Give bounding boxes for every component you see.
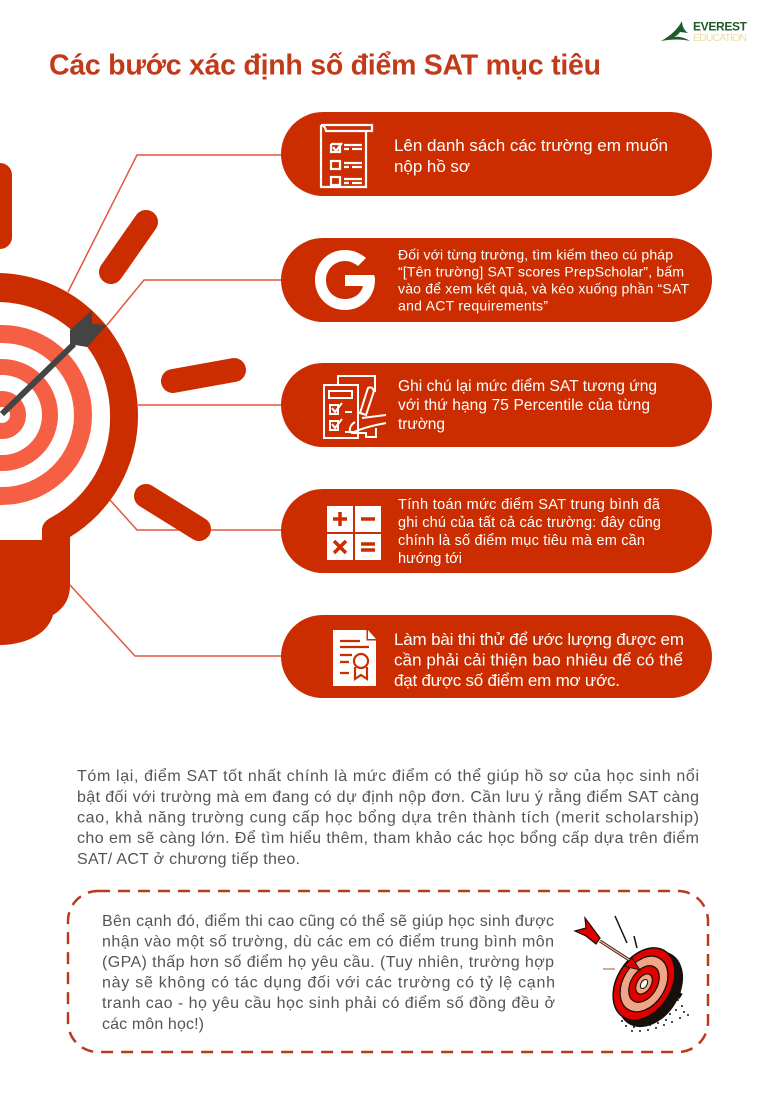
callout text: này sẽ không có tác dụng đối với các trường có tỷ lệ cạnh (102, 974, 555, 992)
connector lines (68, 155, 290, 656)
step 2 text (398, 246, 689, 314)
step 4 pill (281, 489, 712, 573)
step 3 pill (281, 363, 712, 447)
summary paragraph: cao, khả năng trường cung cấp học bổng dựa trên thành tích (merit scholarship) (77, 808, 699, 826)
icon: checklist (321, 125, 372, 187)
title: Các bước xác định số điểm SAT mục tiêu (49, 50, 601, 82)
callout text: tranh cao - họ yêu cầu học sinh phải có điểm số đồng đều ở (102, 994, 556, 1012)
callout box (68, 891, 708, 1052)
callout text: nhận vào một số trường, dù các em có điểm trung bình môn (102, 932, 554, 950)
step 5 text (394, 630, 684, 690)
step 4 text: ghi chú của tất cả các trường: đây cũng (398, 515, 661, 531)
step 5 pill (281, 615, 712, 698)
summary paragraph: Tóm lại, điểm SAT tốt nhất chính là mức điểm có thể giúp hồ sơ của học sinh nổi (77, 767, 699, 785)
summary paragraph (77, 767, 699, 868)
step 2 text: Đối với từng trường, tìm kiếm theo cú pháp (398, 246, 673, 262)
step 3 text (398, 378, 657, 433)
summary paragraph: cho em sẽ càng lớn. Để tìm hiểu thêm, tham khảo các học bổng cấp dựa trên điểm (77, 829, 699, 847)
callout text: các môn học!) (102, 1016, 204, 1033)
step 1 text (394, 136, 668, 176)
icon: target with arrow (575, 916, 697, 1040)
summary paragraph: bật đối với trường mà em đang có dự định nộp đơn. Cần lưu ý rằng điểm SAT càng (77, 787, 699, 806)
step 1 pill (281, 112, 712, 196)
step 2 text: and ACT requirements” (398, 298, 548, 314)
target rings (0, 334, 83, 496)
bulb outline (0, 273, 138, 645)
logo: Everest Education: EDUCATION (693, 32, 747, 44)
step 5 text: Làm bài thi thử để ước lượng được em (394, 630, 684, 649)
summary paragraph: SAT/ ACT ở chương tiếp theo. (77, 851, 300, 868)
callout text: Bên cạnh đó, điểm thi cao cũng có thể sẽ giúp học sinh được (102, 912, 554, 930)
lightbulb target illustration (0, 175, 234, 645)
callout text: (GPA) thấp hơn số điểm họ yêu cầu. (Tuy nhiên, trường hợp (102, 953, 554, 971)
step 5 text: cần phải cải thiện bao nhiêu để có thể (394, 650, 683, 670)
step 1 text: nộp hồ sơ (394, 157, 470, 176)
arrow (2, 310, 107, 414)
step 5 text: đạt được số điểm em mơ ước. (394, 671, 620, 690)
icon: notes and pen (324, 376, 386, 438)
icon: calculator keys (327, 506, 381, 560)
step 2 text: vào để xem kết quả, và kéo xuống phần “SAT (398, 280, 689, 296)
icon: certificate document (333, 630, 376, 686)
step 4 text (398, 497, 661, 567)
icon: Google G (315, 250, 375, 310)
step 3 text: với thứ hạng 75 Percentile của từng (398, 397, 650, 414)
step 3 text: trường (398, 416, 445, 433)
step 4 text: Tính toán mức điểm SAT trung bình đã (398, 497, 661, 513)
step 4 text: hướng tới (398, 551, 462, 567)
step 4 text: chính là số điểm mục tiêu mà em cần (398, 533, 645, 549)
step 2 text: “[Tên trường] SAT scores PrepScholar”, bấm (398, 264, 684, 280)
step 2 pill (281, 238, 712, 322)
step 3 text: Ghi chú lại mức điểm SAT tương ứng (398, 378, 657, 395)
callout text (102, 912, 556, 1033)
logo: Everest Education (661, 20, 748, 44)
step 1 text: Lên danh sách các trường em muốn (394, 136, 668, 155)
logo: Everest Education: EVEREST (693, 20, 748, 34)
bulb rays (0, 175, 234, 529)
